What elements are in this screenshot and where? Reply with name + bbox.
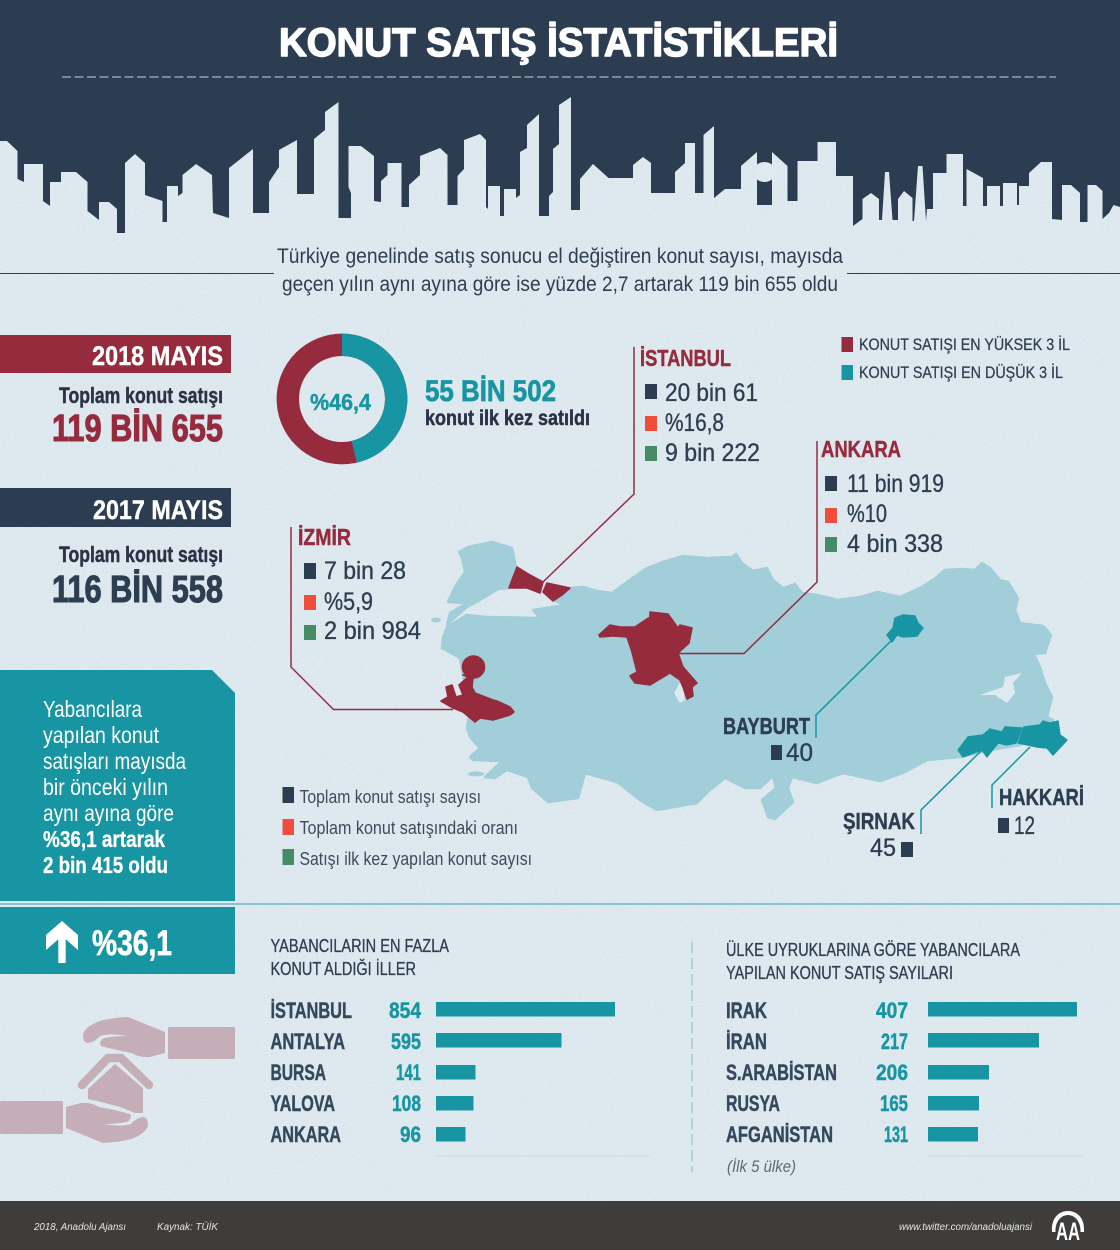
donut chart: %46,4 [310, 389, 371, 415]
callout: Ankara: ANKARA [821, 436, 901, 462]
panel: foreign sales text: satışları mayısda [43, 748, 186, 774]
first-time sales callout [425, 375, 590, 430]
bar chart: countries [726, 940, 1083, 1176]
province: Izmir [441, 656, 514, 722]
callout: Bayburt: 40 [786, 739, 813, 767]
callout: Izmir [291, 524, 453, 710]
chart heading [270, 936, 449, 979]
bar chart: countries: S.ARABİSTAN [726, 1060, 837, 1085]
panel: 2017 May: 116 BİN 558 [52, 569, 223, 611]
callout: Istanbul: 20 bin 61 [665, 379, 758, 407]
bar chart: provinces: 854 [389, 998, 422, 1023]
footer: www.twitter.com/anadoluajansi [899, 1222, 1033, 1233]
province: Istanbul [509, 567, 570, 601]
province: Bayburt [887, 615, 923, 642]
panel: 2018 May: Toplam konut satışı [59, 383, 223, 408]
legend: metric colours [282, 787, 532, 869]
callout: Istanbul [543, 345, 760, 582]
panel: foreign sales text: Yabancılara [43, 696, 142, 722]
province: Hakkari [1018, 721, 1067, 755]
bar chart: provinces: YALOVA [270, 1091, 335, 1116]
callout: Ankara: 4 bin 338 [847, 530, 943, 558]
callout: Ankara: %10 [847, 500, 887, 528]
footer: 2018, Anadolu Ajansı [33, 1222, 126, 1233]
legend: metric colours: Toplam konut satışı sayısı [300, 787, 481, 807]
map legend: highest and lowest: KONUT SATIŞI EN YÜKSEK 3 İL [859, 335, 1070, 354]
callout: Hakkari: HAKKARİ [999, 784, 1084, 810]
icon: Anadolu Agency logo: AA [1056, 1218, 1080, 1246]
callout: Bayburt [723, 640, 892, 767]
chart heading: KONUT ALDIĞI İLLER [270, 958, 416, 979]
province: Ankara [599, 612, 697, 699]
legend: metric colours: Satışı ilk kez yapılan konut sayısı [300, 849, 532, 869]
panel: 2018 May: 2018 MAYIS [92, 341, 223, 371]
chart note: (İlk 5 ülke) [727, 1157, 796, 1176]
panel: foreign sales text: aynı ayına göre [43, 800, 174, 826]
bar chart: countries: RUSYA [726, 1091, 780, 1116]
chart heading [726, 940, 1020, 983]
callout: Izmir: 7 bin 28 [324, 557, 406, 585]
bar chart: countries: 131 [884, 1122, 908, 1147]
bar chart: countries: AFGANİSTAN [726, 1122, 833, 1147]
bar chart: countries: 206 [876, 1060, 908, 1085]
callout: Izmir: %5,9 [324, 588, 373, 616]
province: Sirnak [958, 727, 1022, 757]
bar chart: provinces: BURSA [270, 1060, 326, 1085]
bar chart: provinces: 595 [391, 1029, 421, 1054]
bar chart: provinces: İSTANBUL [270, 998, 352, 1023]
panel: foreign sales text [0, 670, 235, 901]
callout: Izmir: İZMİR [298, 524, 351, 550]
callout: Sirnak: 45 [870, 834, 896, 862]
chart heading: ÜLKE UYRUKLARINA GÖRE YABANCILARA [726, 940, 1020, 960]
bar chart: countries: İRAN [726, 1029, 767, 1054]
bar chart: countries: 407 [876, 998, 908, 1023]
callout: Ankara: 11 bin 919 [847, 470, 944, 498]
map of Turkey [431, 542, 1067, 819]
bar chart: provinces: 108 [392, 1091, 421, 1116]
bar chart: provinces: 96 [400, 1122, 421, 1147]
icon: hands and house [0, 1017, 235, 1143]
icon: Anadolu Agency logo [1052, 1211, 1084, 1246]
bar chart: provinces: 141 [396, 1060, 421, 1085]
callout: Istanbul: İSTANBUL [640, 345, 731, 371]
donut chart [288, 345, 396, 453]
panel: foreign sales text: %36,1 artarak [43, 826, 165, 852]
icon: up arrow [46, 921, 78, 963]
chart heading: YAPILAN KONUT SATIŞ SAYILARI [726, 963, 953, 983]
callout: Istanbul: %16,8 [665, 409, 724, 437]
panel: foreign sales text: 2 bin 415 oldu [43, 852, 168, 878]
callout: Ankara [678, 436, 944, 654]
subtitle [0, 245, 1120, 296]
header with city skyline [0, 0, 1120, 233]
callout: Hakkari: 12 [1014, 812, 1035, 840]
bar chart: provinces: ANTALYA [270, 1029, 345, 1054]
first-time sales callout: 55 BİN 502 [425, 375, 556, 408]
panel: increase badge: %36,1 [92, 924, 172, 963]
callout: Sirnak [843, 750, 982, 862]
callout: Hakkari [992, 747, 1084, 840]
footer [0, 1201, 1120, 1250]
callout: Istanbul: 9 bin 222 [665, 439, 760, 467]
panel: foreign sales text: bir önceki yılın [43, 774, 168, 800]
bar chart: countries: IRAK [726, 998, 767, 1023]
subtitle: Türkiye genelinde satış sonucu el değiştiren konut sayısı, mayısda [277, 245, 843, 268]
bar chart: countries: 165 [880, 1091, 908, 1116]
chart heading: YABANCILARIN EN FAZLA [270, 936, 449, 956]
panel: 2017 May: Toplam konut satışı [59, 542, 223, 567]
title: KONUT SATIŞ İSTATİSTİKLERİ [279, 21, 838, 65]
bar chart: provinces: ANKARA [270, 1122, 341, 1147]
bar chart: provinces [270, 936, 650, 1156]
panel: 2017 May [0, 488, 231, 611]
panel: 2018 May [0, 335, 231, 450]
callout: Bayburt: BAYBURT [723, 713, 810, 739]
bar chart: countries: 217 [881, 1029, 908, 1054]
callout: Sirnak: ŞIRNAK [843, 808, 915, 834]
callout: Izmir: 2 bin 984 [324, 617, 421, 645]
panel: increase badge [0, 907, 235, 974]
subtitle: geçen yılın aynı ayına göre ise yüzde 2,7 artarak 119 bin 655 oldu [282, 273, 838, 296]
map legend: highest and lowest: KONUT SATIŞI EN DÜŞÜK 3 İL [859, 363, 1063, 382]
legend: metric colours: Toplam konut satışındaki oranı [300, 818, 518, 838]
first-time sales callout: konut ilk kez satıldı [425, 407, 590, 430]
map legend: highest and lowest [842, 335, 1070, 382]
panel: foreign sales text: yapılan konut [43, 722, 160, 748]
footer: Kaynak: TÜİK [157, 1221, 219, 1233]
panel: 2018 May: 119 BİN 655 [52, 408, 223, 450]
panel: 2017 May: 2017 MAYIS [93, 495, 223, 525]
